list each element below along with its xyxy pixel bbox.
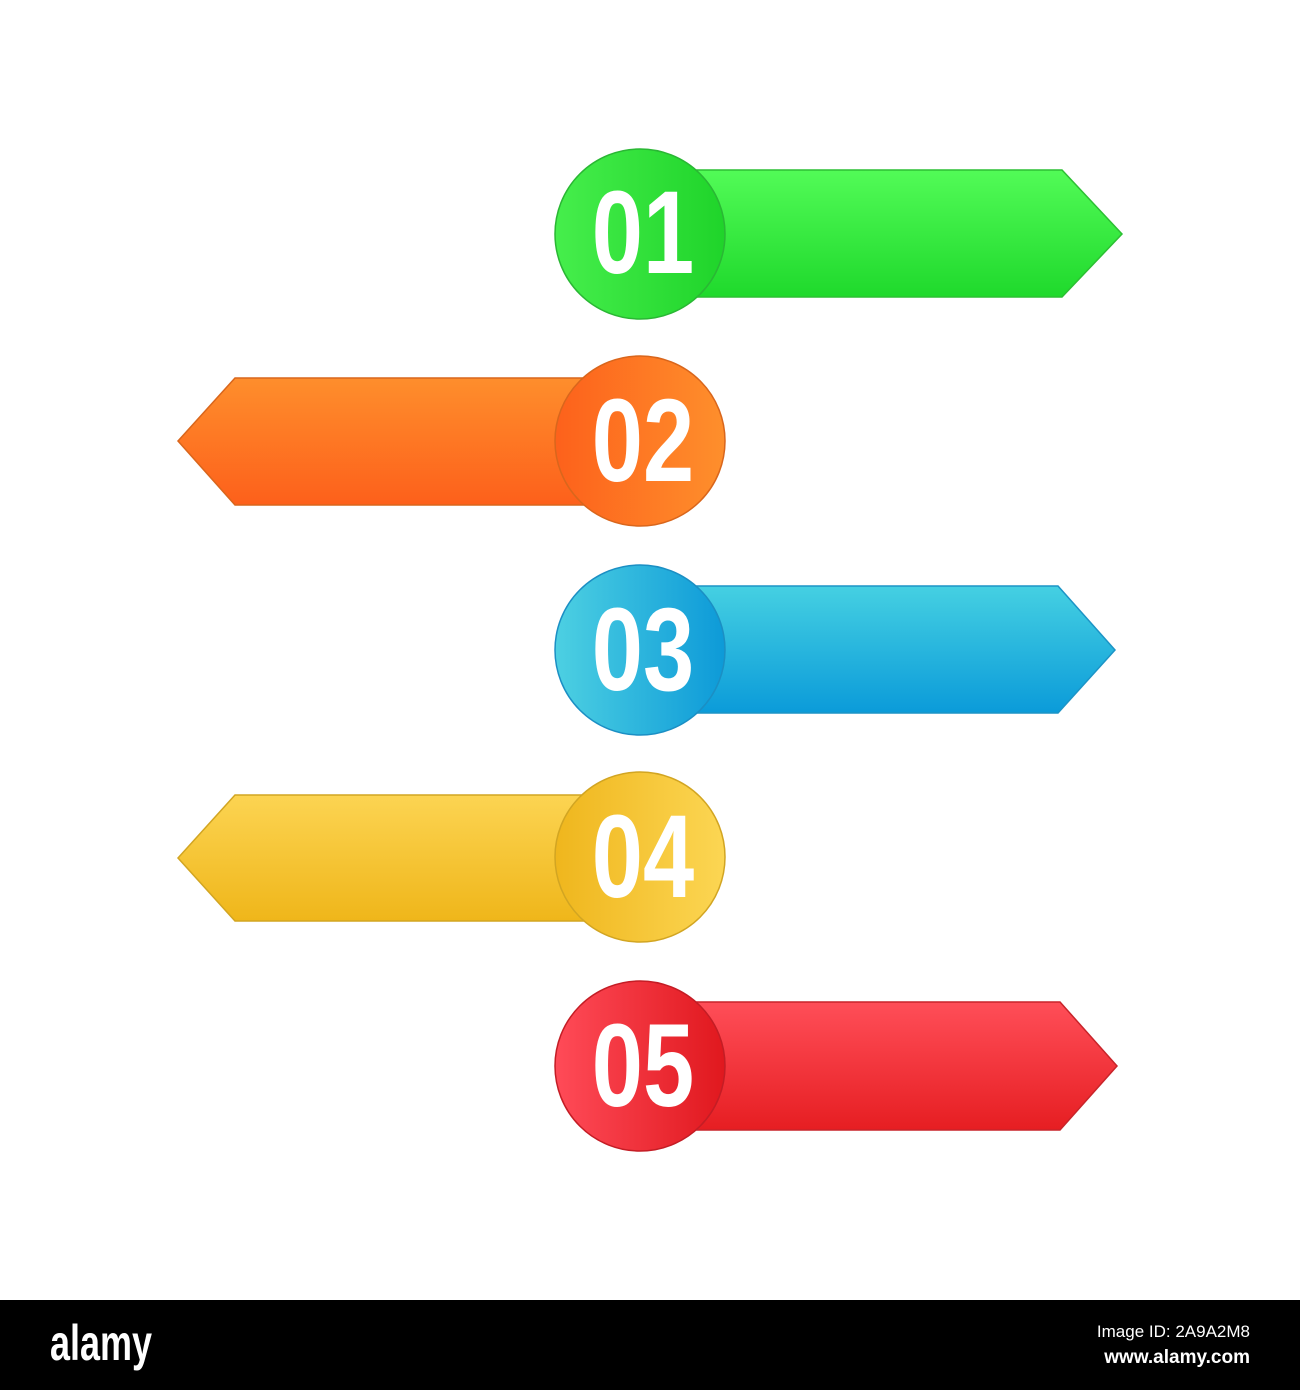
badge 02	[555, 356, 725, 526]
footer url: www.alamy.com	[1103, 1347, 1250, 1368]
badge 03	[555, 565, 725, 735]
badge 05: 05	[592, 1000, 694, 1132]
badge 02: 02	[592, 375, 694, 507]
item 01 (green)	[555, 149, 1122, 319]
arrow band 05	[680, 1002, 1117, 1130]
badge 01	[555, 149, 725, 319]
item 03 (blue)	[555, 565, 1115, 735]
badge 01: 01	[592, 167, 694, 299]
footer logo: alamy	[50, 1316, 152, 1371]
badge 03: 03	[592, 584, 694, 716]
arrow band 02	[178, 378, 600, 505]
arrow band 01	[680, 170, 1122, 297]
arrow band 03	[680, 586, 1115, 713]
item 05 (red)	[555, 981, 1117, 1151]
footer image id: Image ID: 2A9A2M8	[1097, 1322, 1250, 1341]
item 02 (orange)	[178, 356, 725, 526]
arrow band 04	[178, 795, 600, 921]
badge 05	[555, 981, 725, 1151]
badge 04: 04	[592, 791, 694, 923]
item 04 (yellow)	[178, 772, 725, 942]
badge 04	[555, 772, 725, 942]
footer bar	[0, 1300, 1300, 1390]
